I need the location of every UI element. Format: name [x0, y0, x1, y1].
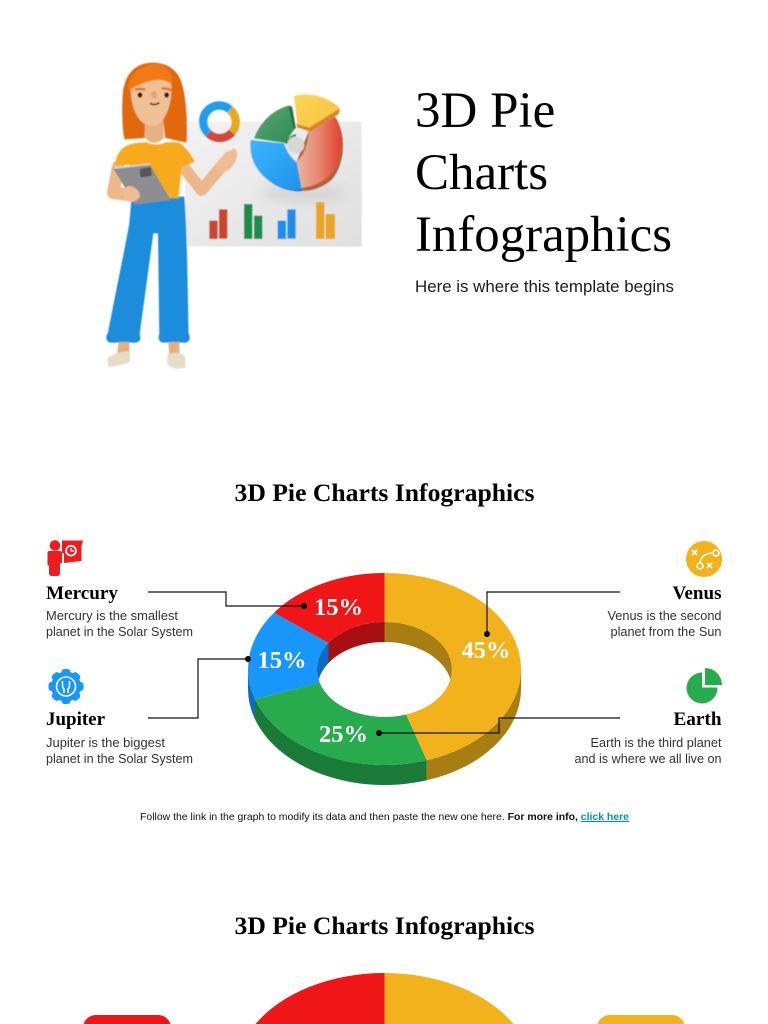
centre hub — [287, 136, 304, 154]
right arm — [182, 165, 223, 190]
yellow slice 45% — [384, 573, 521, 760]
title: 3D Pie — [415, 83, 555, 139]
icon: strategy — [686, 541, 722, 577]
second section heading: 3D Pie Charts Infographics — [234, 913, 535, 940]
face details — [135, 88, 172, 105]
yellow label pill (cropped) — [598, 1015, 684, 1024]
presentation board — [185, 122, 362, 247]
red slice with rim — [297, 117, 343, 191]
label: Mercury: planet in the Solar System — [46, 625, 193, 639]
percentage labels — [258, 594, 510, 748]
connector dots — [245, 603, 490, 736]
inner walls — [317, 622, 452, 680]
percentage labels: 25% — [319, 721, 368, 748]
neck — [144, 118, 164, 143]
label: Jupiter: Jupiter — [46, 710, 105, 730]
woman figure — [106, 63, 237, 369]
bar charts on board — [209, 202, 335, 239]
red label pill (cropped) — [84, 1015, 170, 1024]
pants — [107, 197, 189, 337]
blue slice 15% — [248, 613, 328, 699]
blue slice with rim — [251, 147, 302, 191]
label: Mercury: Mercury is the smallest — [46, 609, 179, 623]
outer walls — [248, 669, 521, 785]
label: Venus: Venus — [672, 584, 722, 604]
title: Infographics — [415, 207, 672, 263]
ankles and shoes — [107, 342, 185, 369]
illustration: woman presenting charts — [106, 63, 362, 369]
label: Jupiter: planet in the Solar System — [46, 752, 193, 766]
label: Mercury: Mercury — [46, 584, 119, 604]
holding hand — [123, 186, 140, 202]
left arm — [113, 167, 135, 196]
label: Earth: Earth is the third planet — [590, 736, 722, 750]
title — [415, 83, 672, 263]
section heading: 3D Pie Charts Infographics — [234, 480, 535, 507]
small ring chart — [203, 105, 236, 138]
percentage labels: 45% — [462, 637, 510, 664]
large 3D pie chart — [250, 94, 343, 191]
label: Earth: Earth — [674, 710, 722, 730]
label: Jupiter — [46, 710, 193, 766]
subtitle: Here is where this template begins — [415, 278, 674, 296]
footer note: Follow the link in the graph to modify its data and then paste the new one here. For more info, click here — [140, 812, 629, 823]
hair back — [122, 63, 187, 143]
label: Earth: and is where we all live on — [574, 752, 722, 766]
label: Jupiter: Jupiter is the biggest — [46, 736, 166, 750]
raised hand — [216, 148, 237, 172]
pant cuffs — [106, 332, 190, 343]
percentage labels: 15% — [258, 647, 306, 674]
3D donut chart — [248, 573, 521, 785]
icon: presenter — [48, 540, 83, 576]
label: Venus — [608, 584, 722, 639]
tablet — [113, 164, 171, 204]
label: Earth — [574, 710, 722, 766]
shirt — [115, 142, 195, 198]
second pie chart (cropped) — [256, 973, 514, 1024]
title: Charts — [415, 145, 548, 201]
yellow slice — [297, 108, 340, 132]
green slice — [254, 106, 295, 143]
connector lines — [148, 592, 620, 733]
fringe — [128, 64, 173, 91]
label: Venus: Venus is the second — [608, 609, 722, 623]
face — [131, 73, 172, 126]
icon: gear — [48, 669, 84, 704]
percentage labels: 15% — [314, 594, 363, 621]
label: Venus: planet from the Sun — [610, 625, 722, 639]
red slice 15% — [274, 573, 384, 643]
green slice 25% — [255, 683, 427, 765]
label: Mercury — [46, 584, 193, 639]
icon: pie — [687, 668, 722, 703]
